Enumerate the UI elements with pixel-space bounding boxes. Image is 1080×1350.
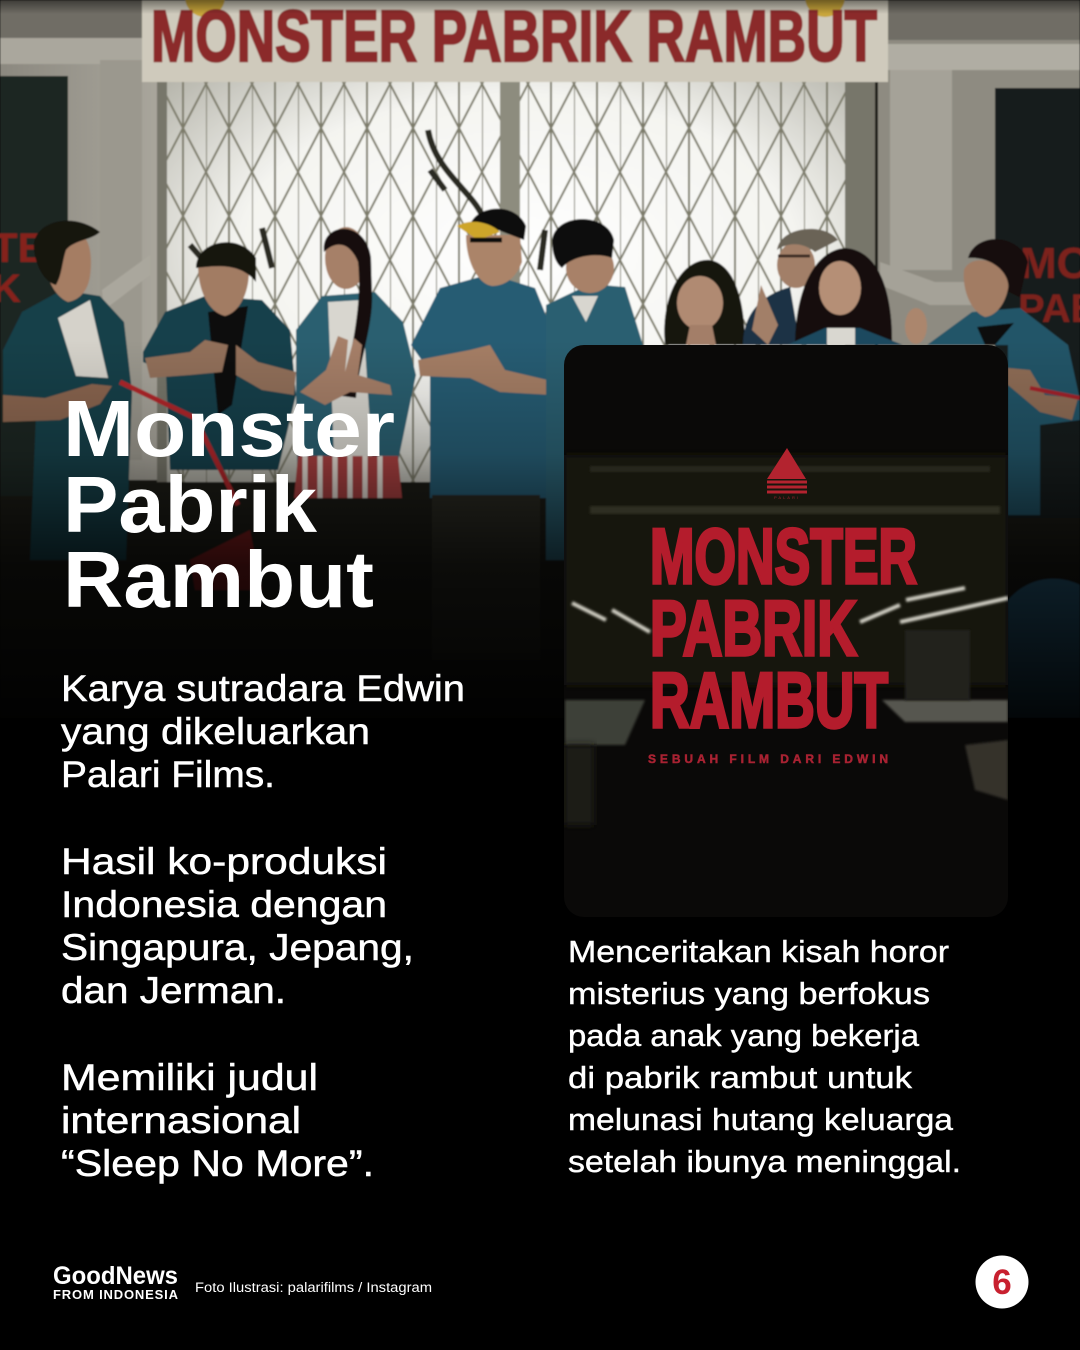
- poster title: MONSTER: [650, 512, 917, 600]
- text block: synopsis: melunasi hutang keluarga: [568, 1102, 954, 1137]
- text block: synopsis: [568, 934, 961, 1179]
- person 8: [787, 248, 903, 345]
- logo: GoodNews from Indonesia: FROM INDONESIA: [53, 1287, 179, 1302]
- logo: GoodNews from Indonesia: [53, 1262, 179, 1302]
- poster: [564, 345, 1008, 917]
- title: Monster: [63, 384, 395, 473]
- gate: [157, 82, 875, 482]
- text block: synopsis: misterius yang berfokus: [568, 976, 930, 1011]
- right lower blue shape: [1008, 579, 1080, 718]
- text block: left column: yang dikeluarkan: [61, 711, 370, 752]
- text block: left column: “Sleep No More”.: [61, 1143, 374, 1184]
- title: [63, 384, 395, 624]
- poster subtitle: SEBUAH FILM DARI EDWIN: [648, 752, 888, 766]
- photo darkening: [0, 0, 1080, 12]
- text block: left column: internasional: [61, 1100, 301, 1141]
- page number badge: 6: [992, 1263, 1012, 1302]
- poster logo: PALARI: [774, 495, 800, 500]
- poster title: [652, 526, 918, 730]
- right dark banner: [995, 88, 1080, 518]
- text block: left column: Karya sutradara Edwin: [61, 668, 465, 709]
- photo: cast at factory gate: [0, 0, 1080, 718]
- person 3: [294, 227, 416, 498]
- poster title: PABRIK: [650, 584, 857, 672]
- person 2: [143, 242, 296, 470]
- photo credit: Foto Ilustrasi: palarifilms / Instagram: [195, 1280, 432, 1295]
- person 5: [546, 219, 643, 560]
- text block: left column: [61, 668, 465, 1184]
- text block: left column: Singapura, Jepang,: [61, 927, 414, 968]
- text block: left column: Indonesia dengan: [61, 884, 387, 925]
- left dark banner: [0, 75, 69, 482]
- page number badge: [976, 1256, 1028, 1308]
- text block: synopsis: Menceritakan kisah horor: [568, 934, 949, 969]
- text block: synopsis: setelah ibunya meninggal.: [568, 1144, 961, 1179]
- logo: GoodNews from Indonesia: GoodNews: [53, 1262, 178, 1290]
- text block: synopsis: di pabrik rambut untuk: [568, 1060, 913, 1095]
- poster logo: [767, 448, 807, 500]
- text block: left column: Memiliki judul: [61, 1057, 318, 1098]
- title: Pabrik: [63, 460, 318, 549]
- poster title: RAMBUT: [650, 656, 888, 744]
- person 4: yellow cap: [410, 208, 548, 502]
- ribbon: [120, 382, 238, 505]
- text block: synopsis: pada anak yang bekerja: [568, 1018, 920, 1053]
- building wall: [0, 0, 1080, 600]
- person 7: [743, 229, 838, 345]
- person 6: [664, 260, 745, 345]
- person 9: [905, 239, 1080, 515]
- text block: left column: dan Jerman.: [61, 970, 286, 1011]
- title: Rambut: [63, 535, 374, 624]
- poster factory scene: [564, 455, 1008, 825]
- person 1: [3, 221, 132, 560]
- text block: left column: Palari Films.: [61, 754, 275, 795]
- text block: left column: Hasil ko-produksi: [61, 841, 387, 882]
